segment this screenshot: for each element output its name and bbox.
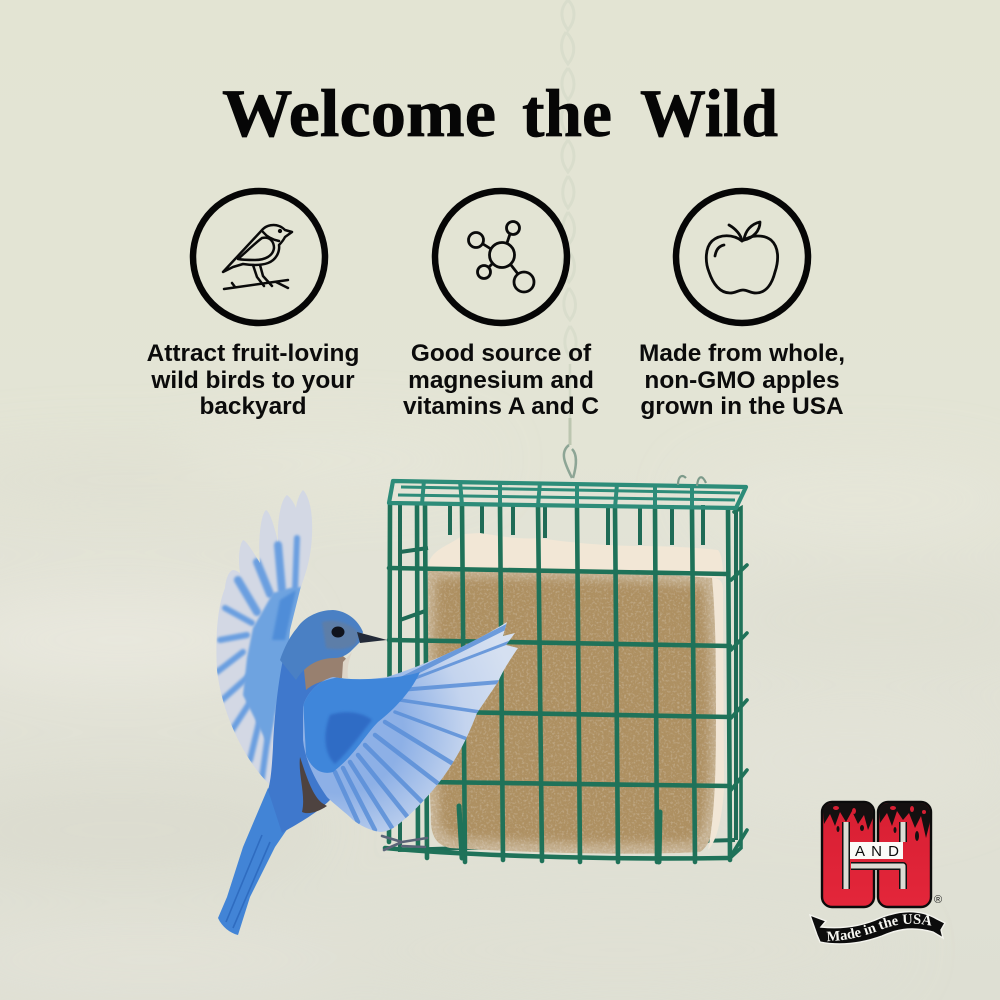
title: Wild <box>640 75 778 151</box>
near wing <box>303 622 518 832</box>
caption: nutrition: vitamins A and C <box>403 393 599 420</box>
letter slots <box>846 822 903 889</box>
belly <box>300 757 327 813</box>
joined middle of the letters <box>870 859 882 865</box>
head <box>280 610 363 680</box>
flame shading <box>823 803 930 841</box>
caption: nutrition: Good source of <box>411 340 592 367</box>
AND text: AND <box>855 843 899 860</box>
tail feather lines <box>226 835 270 928</box>
feature: attract birds <box>147 191 359 420</box>
caption: attract birds: wild birds to your <box>150 367 355 394</box>
face shading <box>322 621 360 649</box>
beak <box>357 632 387 643</box>
caption: attract birds: Attract fruit-loving <box>147 340 359 367</box>
rear cage wires <box>398 505 736 850</box>
cage lid <box>389 476 746 509</box>
suet face edge <box>427 569 721 854</box>
icon ring: apple <box>676 191 808 323</box>
icon ring: molecule <box>435 191 567 323</box>
letter C <box>822 802 874 907</box>
suet grain <box>427 569 721 854</box>
banner text: Made in the USA <box>826 914 932 942</box>
caption: apples: Made from whole, <box>639 340 845 367</box>
feature: apples <box>639 191 845 420</box>
suet side <box>708 578 724 850</box>
tail <box>218 788 290 935</box>
suet face <box>435 577 711 844</box>
icon: apple <box>706 222 778 293</box>
icon: molecule <box>468 222 534 292</box>
caption: nutrition: magnesium and <box>408 367 594 394</box>
letter S <box>878 802 931 907</box>
eye <box>332 626 344 638</box>
pale throat <box>342 652 352 678</box>
feature: nutrition <box>403 191 599 420</box>
icon ring: bird <box>193 191 325 323</box>
suet feeder <box>385 476 747 862</box>
title: the <box>522 75 612 151</box>
suet top <box>428 533 723 578</box>
C and S logo <box>809 800 946 944</box>
breast <box>303 652 347 690</box>
caption: attract birds: backyard <box>199 393 307 420</box>
ribbon banner <box>810 912 945 944</box>
body <box>268 650 345 833</box>
title: Welcome <box>222 75 496 151</box>
red flecks in flames <box>833 806 926 814</box>
caption: apples: non-GMO apples <box>644 367 840 394</box>
front cage grid <box>385 505 747 862</box>
far wing <box>216 490 312 784</box>
bluebird <box>200 480 525 935</box>
icon: perched bird <box>223 225 292 289</box>
bird's foot <box>382 836 427 850</box>
suet block <box>427 533 724 854</box>
registered mark: ® <box>934 894 942 906</box>
AND box <box>850 842 903 859</box>
caption: apples: grown in the USA <box>640 393 844 420</box>
hanging chain <box>562 0 576 478</box>
